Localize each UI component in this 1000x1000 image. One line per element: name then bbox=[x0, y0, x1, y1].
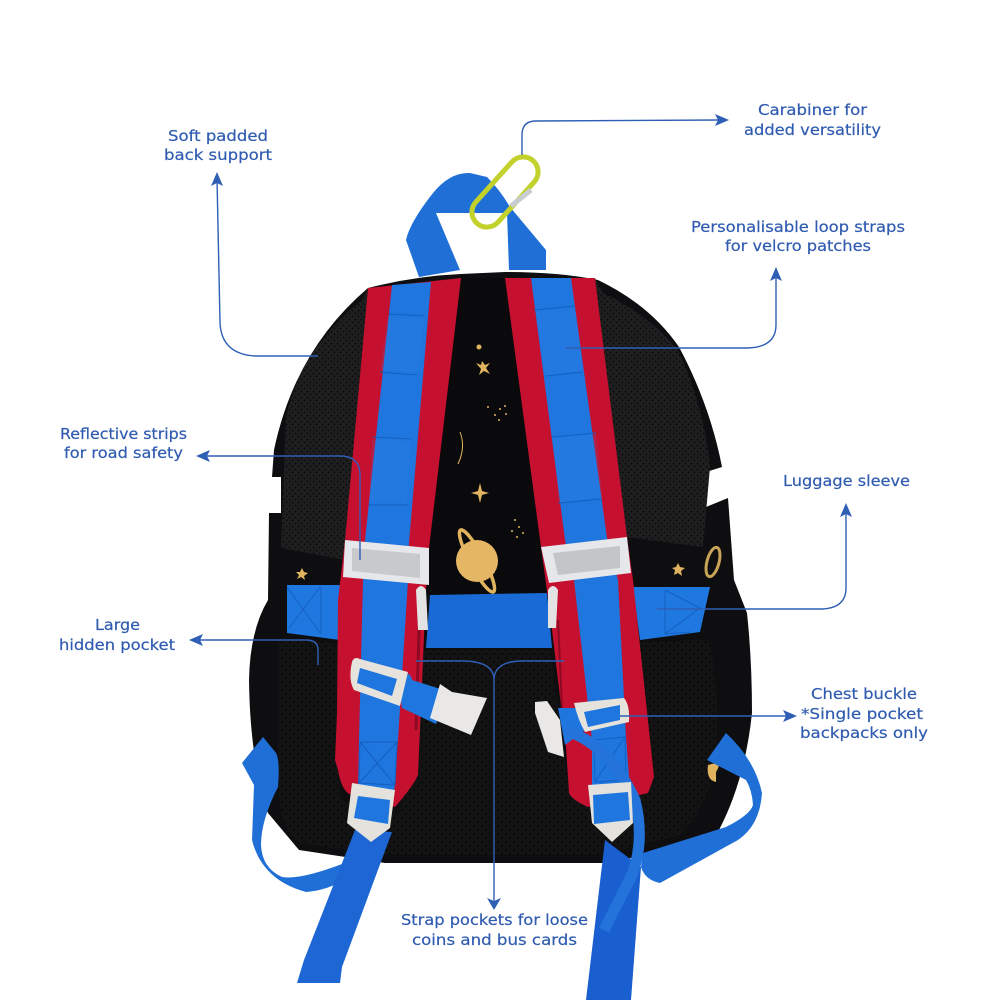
backpack illustration bbox=[242, 151, 762, 1000]
callout: chest buckle: Chest buckle bbox=[811, 685, 917, 703]
callout: carabiner: added versatility bbox=[744, 121, 881, 139]
callout: large hidden pocket bbox=[59, 616, 318, 665]
callout: carabiner bbox=[522, 101, 881, 155]
callout: reflective strips bbox=[60, 425, 360, 560]
padding highlights bbox=[369, 317, 424, 503]
callout: chest buckle bbox=[620, 685, 928, 742]
callout: large hidden pocket: hidden pocket bbox=[59, 636, 175, 654]
left lower buckle bbox=[347, 783, 395, 842]
callout: personalisable loop straps bbox=[566, 218, 905, 348]
webbing band bbox=[287, 585, 710, 648]
callout: personalisable loop straps: for velcro patches bbox=[725, 237, 871, 255]
left lower strap bbox=[297, 830, 392, 983]
right lower strap bbox=[586, 840, 641, 1000]
upper padded mesh back bbox=[281, 278, 710, 560]
callout: reflective strips: for road safety bbox=[64, 444, 183, 462]
callout: soft padded back support: back support bbox=[164, 146, 272, 164]
callout: strap pockets: coins and bus cards bbox=[412, 931, 577, 949]
left shoulder strap bbox=[335, 278, 461, 807]
right shoulder strap bbox=[505, 278, 654, 807]
callout: luggage sleeve bbox=[657, 472, 910, 609]
callout: chest buckle: *Single pocket bbox=[801, 705, 923, 723]
callout: strap pockets bbox=[401, 661, 588, 949]
side print strip stars bbox=[296, 546, 723, 782]
stars bbox=[458, 344, 524, 538]
callout: carabiner: Carabiner for bbox=[758, 101, 868, 119]
lower mesh pocket bbox=[278, 640, 717, 855]
zipper pulls bbox=[416, 586, 558, 630]
callout: soft padded back support: Soft padded bbox=[168, 127, 268, 145]
thin strap tail bbox=[565, 730, 639, 930]
left chest slider and buckle bbox=[350, 658, 487, 735]
carabiner clip bbox=[466, 151, 544, 233]
callout: reflective strips: Reflective strips bbox=[60, 425, 187, 443]
callout: strap pockets: Strap pockets for loose bbox=[401, 911, 588, 929]
callout: large hidden pocket: Large bbox=[95, 616, 140, 634]
callout: personalisable loop straps: Personalisable loop straps bbox=[691, 218, 905, 236]
reflective strip left bbox=[343, 540, 429, 585]
strap pocket zipper bbox=[416, 600, 420, 730]
backpack body silhouette bbox=[249, 272, 752, 863]
padding highlights bbox=[536, 308, 602, 503]
reflective strip right bbox=[541, 537, 631, 583]
callout: luggage sleeve: Luggage sleeve bbox=[783, 472, 910, 490]
center space-print panel bbox=[426, 278, 549, 595]
callout: soft padded back support bbox=[164, 127, 318, 356]
callout: chest buckle: backpacks only bbox=[800, 724, 928, 742]
left side strap bbox=[242, 737, 346, 892]
right chest slider and buckle bbox=[535, 698, 629, 757]
right side strap bbox=[641, 733, 762, 883]
right lower buckle bbox=[588, 782, 633, 842]
planet bbox=[454, 527, 500, 595]
top handle loop bbox=[406, 173, 546, 277]
